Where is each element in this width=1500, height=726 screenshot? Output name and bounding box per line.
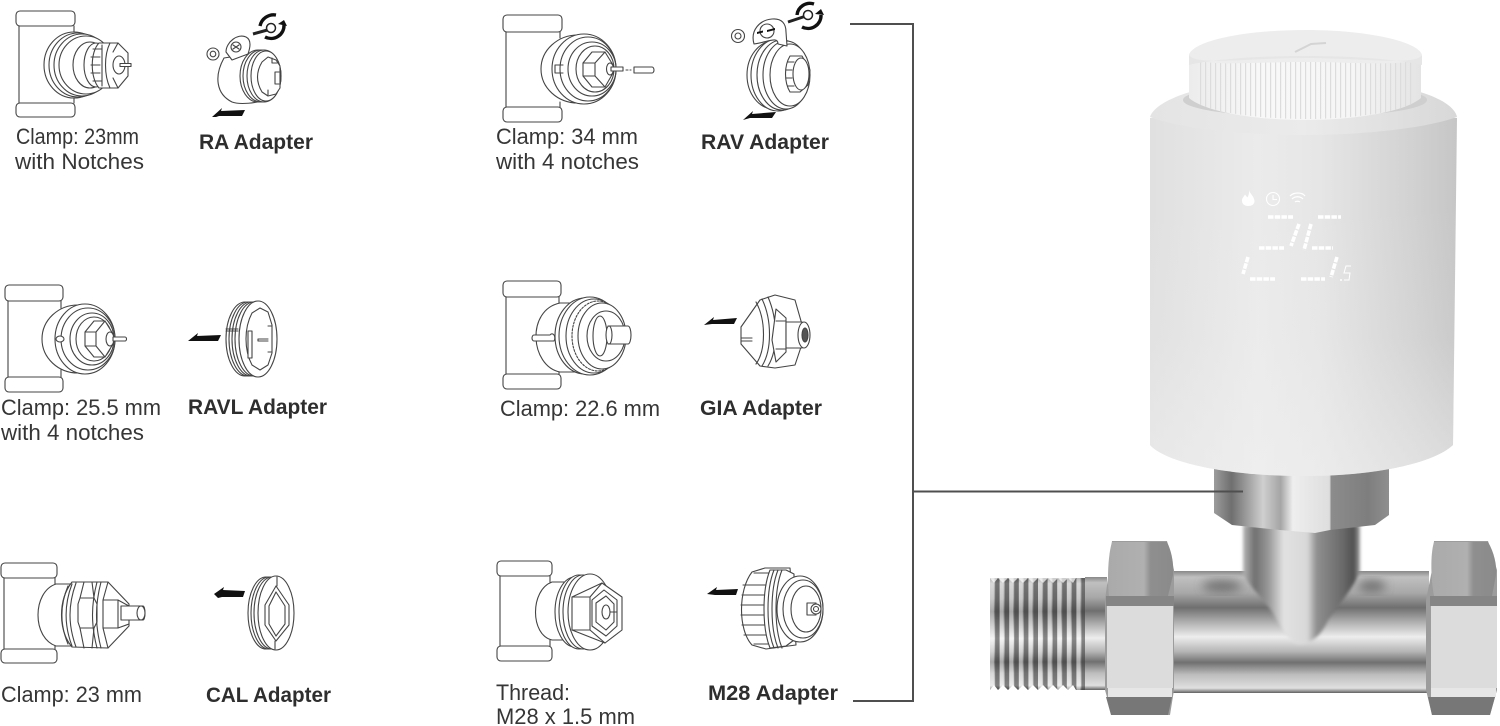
icon: clock	[1266, 192, 1280, 206]
label: RAV Adapter: RAV Adapter	[701, 131, 829, 154]
label: clamp 22.6 mm: Clamp: 22.6 mm	[500, 396, 660, 421]
adapter: CAL	[214, 576, 294, 650]
product: valve fitting	[990, 465, 1497, 715]
valve 2: clamp 34 mm with 4 notches	[503, 15, 654, 122]
valve 1: clamp 23mm with notches	[16, 11, 131, 117]
threaded end	[990, 577, 1107, 690]
left hex nut	[1105, 541, 1174, 715]
temperature display 25.5	[1243, 217, 1351, 280]
icon: screw and rotate arrow	[253, 15, 287, 38]
label: thread M28 x 1.5 mm: Thread:	[496, 680, 570, 705]
label: clamp 25.5 mm with 4 notches	[0, 395, 161, 445]
label: clamp 25.5 mm with 4 notches: Clamp: 25.5 mm	[1, 395, 161, 420]
arrow: insert direction	[707, 587, 738, 595]
top ring	[1150, 92, 1457, 135]
label: clamp 23mm with notches	[14, 124, 144, 174]
valve 3: clamp 25.5 mm with 4 notches	[5, 285, 126, 392]
adapter: GIA	[704, 295, 810, 368]
arrow: insert direction	[212, 108, 245, 117]
product: thermostat body	[1150, 30, 1457, 476]
valve 5: clamp 23 mm	[1, 563, 145, 663]
arrow: insert direction	[743, 111, 776, 120]
arrow: insert direction	[188, 333, 221, 341]
display icons	[1242, 190, 1305, 206]
knob	[1189, 30, 1422, 120]
label: clamp 23mm with notches: with Notches	[14, 149, 144, 174]
adapter: RA	[207, 15, 287, 117]
label: RA Adapter: RA Adapter	[199, 131, 313, 154]
icon: flame	[1242, 190, 1254, 206]
icon: wifi	[1290, 193, 1305, 202]
main pipe	[1172, 571, 1429, 693]
label: thread M28 x 1.5 mm	[496, 680, 635, 726]
vertical stem	[1243, 525, 1360, 644]
right hex nut	[1426, 541, 1497, 715]
label: clamp 25.5 mm with 4 notches: with 4 notches	[0, 420, 144, 445]
valve 4: clamp 22.6 mm	[503, 281, 631, 389]
adapter: RAVL	[188, 301, 277, 377]
label: clamp 34 mm with 4 notches: Clamp: 34 mm	[496, 124, 638, 149]
label: CAL Adapter: CAL Adapter	[206, 684, 331, 707]
metal collar	[1214, 465, 1389, 533]
connector line to collar	[914, 490, 1243, 492]
label: clamp 34 mm with 4 notches	[495, 124, 639, 174]
pipe shadows beside stem	[1202, 580, 1386, 592]
label: clamp 23mm with notches: Clamp: 23mm	[16, 124, 139, 149]
connector bracket line	[850, 24, 913, 701]
valve 6: thread M28 x 1.5 mm	[497, 561, 622, 661]
arrow: insert direction	[214, 587, 245, 598]
adapter: RAV	[732, 3, 824, 120]
adapter: M28	[707, 568, 823, 649]
label: clamp 34 mm with 4 notches: with 4 notches	[495, 149, 639, 174]
label: clamp 23 mm: Clamp: 23 mm	[1, 682, 142, 707]
icon: screw and rotate arrow	[788, 3, 824, 28]
label: GIA Adapter: GIA Adapter	[700, 397, 822, 420]
label: RAVL Adapter: RAVL Adapter	[188, 396, 327, 419]
arrow: insert direction	[704, 317, 737, 325]
label: M28 Adapter: M28 Adapter	[708, 682, 838, 705]
